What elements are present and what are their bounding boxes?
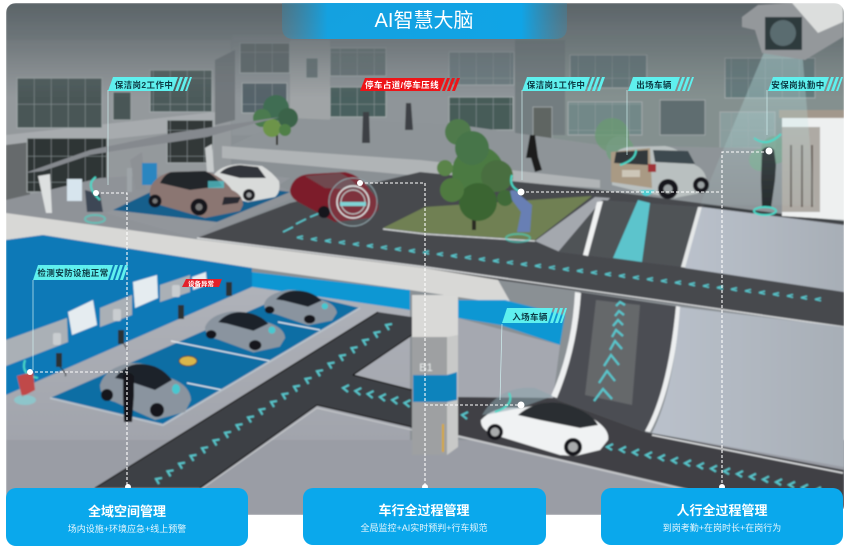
people bbox=[85, 103, 776, 422]
card: personnel management bbox=[601, 488, 843, 545]
surveillance camera bbox=[700, 3, 843, 205]
green lawn bbox=[383, 196, 592, 240]
connector lines bbox=[27, 90, 772, 490]
tag: cleaner 1 bbox=[522, 77, 605, 91]
blue parking pad bbox=[50, 292, 360, 425]
pillar: B1 bbox=[419, 362, 433, 374]
tree right bbox=[595, 118, 789, 171]
person: walker bbox=[526, 135, 542, 172]
blue wall bbox=[6, 235, 252, 395]
info boards bbox=[68, 300, 97, 335]
tag: safety equipment bbox=[33, 265, 128, 280]
right pavement bbox=[685, 207, 844, 292]
tag: cleaner 2: 保洁岗2工作中 bbox=[115, 80, 173, 90]
road arrows bbox=[156, 213, 834, 496]
exit ramp bbox=[558, 200, 702, 267]
person: patrol bbox=[123, 373, 134, 422]
silver SUV bbox=[611, 146, 709, 199]
solar carport bbox=[25, 117, 280, 213]
title banner: AI智慧大脑 bbox=[375, 9, 473, 32]
person: guard bbox=[761, 147, 776, 208]
overpass beam bbox=[6, 213, 512, 305]
buildings bbox=[6, 3, 844, 205]
car rear bbox=[264, 290, 337, 325]
grey cars in bays bbox=[100, 290, 337, 420]
teal markers bbox=[24, 134, 781, 412]
tag: device alert: 设备异常 bbox=[188, 279, 214, 288]
person: pedestrian pair bbox=[362, 103, 413, 143]
lower floor bbox=[6, 286, 410, 440]
mauve car bbox=[148, 171, 243, 218]
title banner bbox=[282, 3, 567, 39]
lower-right road bbox=[457, 397, 844, 515]
lower-left road bbox=[95, 312, 412, 488]
entrance ramp bbox=[553, 292, 680, 432]
alarm box bbox=[14, 372, 36, 405]
tag: exit vehicle: 出场车辆 bbox=[636, 80, 672, 90]
tag: parking violation bbox=[360, 78, 460, 91]
person: cleaner one bbox=[510, 190, 532, 232]
card: space management: 全域空间管理 bbox=[88, 504, 166, 519]
pillar bbox=[412, 295, 458, 455]
white car upper bbox=[213, 164, 280, 202]
tag: entry vehicle bbox=[502, 308, 567, 323]
blue parking pad upper bbox=[113, 190, 290, 223]
tag: cleaner 2 bbox=[108, 77, 192, 91]
tag: exit vehicle bbox=[628, 77, 694, 91]
white sedan bbox=[481, 388, 608, 456]
tag: device alert bbox=[182, 279, 222, 288]
chargers bbox=[53, 282, 232, 376]
tree center bbox=[437, 119, 513, 230]
person: cleaner two bbox=[85, 190, 103, 212]
upper asphalt road bbox=[197, 172, 844, 327]
card: vehicle management bbox=[303, 488, 546, 545]
tag: cleaner 1: 保洁岗1工作中 bbox=[527, 80, 585, 90]
tag: entry vehicle: 入场车辆 bbox=[512, 312, 548, 322]
red car with sensor ring bbox=[290, 172, 378, 226]
card: vehicle management: 全局监控+AI实时预判+行车规范 bbox=[360, 522, 488, 533]
tag: security guard: 安保岗执勤中 bbox=[771, 80, 825, 90]
tag: parking violation: 停车占道/停车压线 bbox=[365, 80, 439, 90]
car middle bbox=[205, 311, 285, 352]
card: space management bbox=[6, 488, 248, 546]
tag: safety equipment: 检测安防设施正常 bbox=[37, 268, 109, 278]
card: personnel management: 到岗考勤+在岗时长+在岗行为 bbox=[663, 522, 781, 533]
guard booth bbox=[779, 110, 844, 220]
plaza and upper ground bbox=[298, 118, 750, 160]
card: vehicle management: 车行全过程管理 bbox=[378, 503, 470, 518]
tree left bbox=[253, 95, 298, 145]
card: personnel management: 人行全过程管理 bbox=[676, 503, 768, 518]
card: space management: 场内设施+环境应急+线上预警 bbox=[68, 523, 186, 534]
tag: security guard bbox=[768, 77, 843, 91]
car front bbox=[100, 363, 191, 420]
